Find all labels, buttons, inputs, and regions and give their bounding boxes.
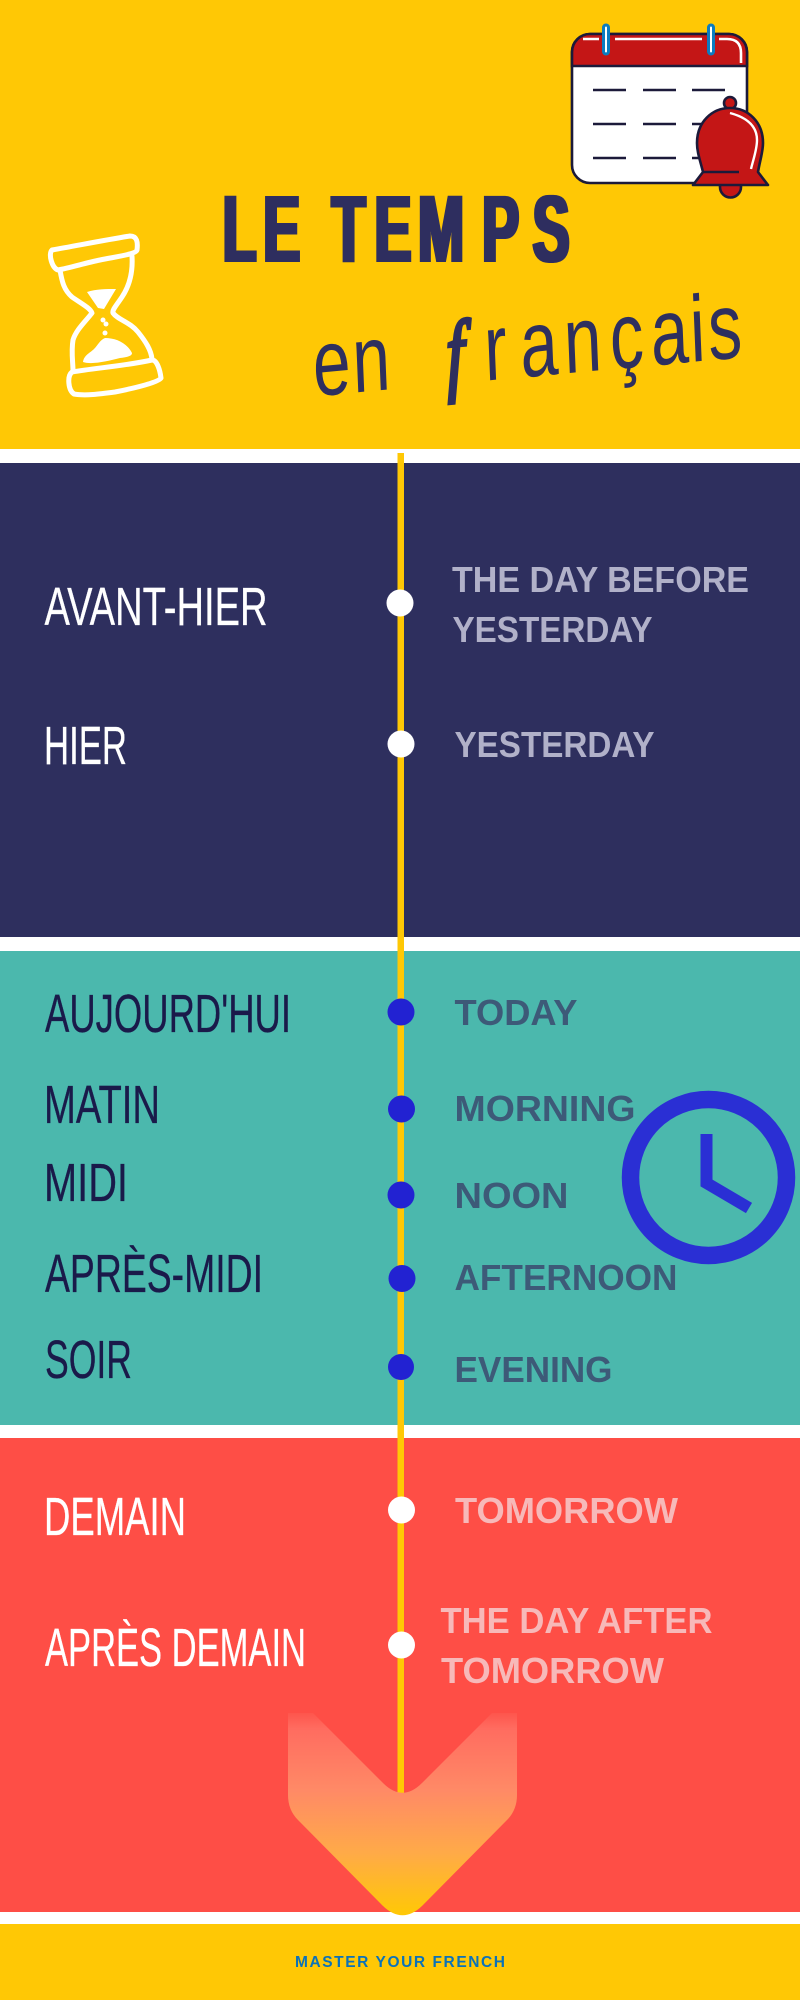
- row: avant-hier: THE DAY BEFORE: [452, 559, 749, 600]
- icon: hourglass: [50, 236, 161, 395]
- row: après demain: [45, 1600, 712, 1691]
- panel: today (teal): [0, 951, 800, 1425]
- row: hier: [44, 716, 654, 776]
- row: après demain: TOMORROW: [441, 1650, 664, 1691]
- row: demain: [44, 1487, 678, 1547]
- row: midi: MIDI: [44, 1153, 128, 1213]
- row: après demain: APRÈS DEMAIN: [45, 1618, 306, 1678]
- row: après demain: THE DAY AFTER: [440, 1600, 712, 1641]
- row: après-midi: [45, 1244, 678, 1304]
- row: avant-hier: YESTERDAY: [452, 609, 652, 650]
- subtitle: en français: rançais: [482, 273, 744, 401]
- row: hier: YESTERDAY: [454, 724, 654, 765]
- row: avant-hier: [44, 559, 749, 650]
- panel: header: [0, 0, 800, 449]
- row: après-midi: APRÈS-MIDI: [45, 1244, 263, 1304]
- row: après-midi: AFTERNOON: [454, 1257, 678, 1298]
- row: midi: [44, 1153, 568, 1216]
- panel: footer: [0, 1924, 800, 2000]
- row: soir: [45, 1330, 612, 1390]
- row: soir: SOIR: [45, 1330, 132, 1390]
- timeline line: [398, 453, 404, 1794]
- row: aujourd'hui: TODAY: [454, 992, 578, 1033]
- panel: future (red): [0, 1438, 800, 1912]
- row: matin: [44, 1075, 636, 1135]
- subtitle: en français: f: [444, 301, 474, 404]
- row: demain: TOMORROW: [455, 1490, 678, 1531]
- row: demain: DEMAIN: [44, 1487, 186, 1547]
- subtitle: en français: en: [311, 306, 392, 417]
- panel: past (navy): [0, 463, 800, 937]
- icon: calendar: [572, 25, 747, 183]
- row: aujourd'hui: [45, 984, 578, 1044]
- row: matin: MORNING: [454, 1088, 636, 1129]
- footer text: MASTER YOUR FRENCH: [295, 1954, 505, 1971]
- row: aujourd'hui: AUJOURD'HUI: [45, 984, 291, 1044]
- row: midi: NOON: [454, 1175, 568, 1216]
- icon: clock: [630, 1100, 786, 1256]
- row: matin: MATIN: [44, 1075, 160, 1135]
- row: avant-hier: AVANT-HIER: [44, 577, 268, 637]
- icon: bell: [693, 97, 768, 198]
- arrow: chevron down: [288, 1713, 517, 1915]
- title: LE TEMPS: LE TEMPS: [223, 177, 570, 282]
- row: hier: HIER: [44, 716, 127, 776]
- row: soir: EVENING: [454, 1349, 612, 1390]
